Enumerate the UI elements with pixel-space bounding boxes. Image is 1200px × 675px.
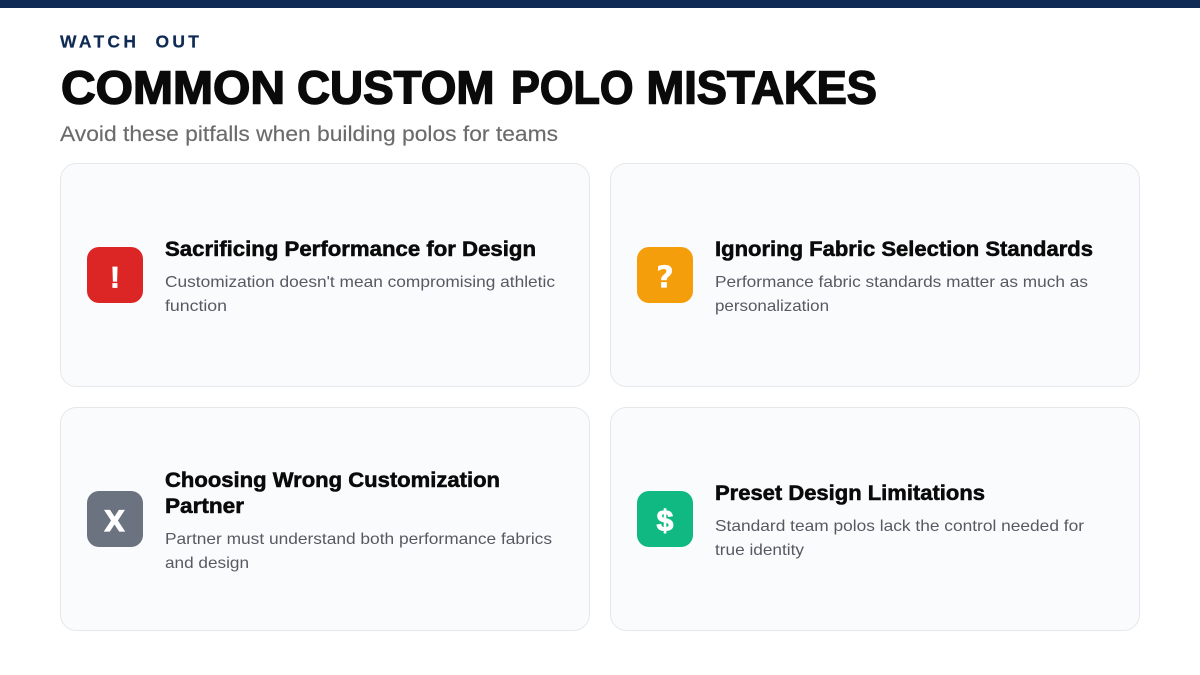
- card description: Customization doesn't mean compromising athletic: [165, 274, 555, 291]
- card title: [165, 468, 500, 518]
- card description: Partner must understand both performance fabrics: [165, 531, 552, 548]
- icon: x mark: X: [104, 504, 126, 538]
- card description: [165, 531, 552, 572]
- panel: preset design limitations: [610, 408, 1140, 630]
- card title: Partner: [165, 494, 245, 518]
- card description: and design: [165, 555, 249, 572]
- card description: function: [165, 298, 227, 315]
- eyebrow: watch out: WATCH OUT: [60, 32, 199, 52]
- panel: choosing wrong customization partner: [60, 408, 590, 630]
- card description: [715, 518, 1085, 559]
- card description: [165, 274, 555, 315]
- panel: sacrificing performance for design: [60, 164, 590, 386]
- icon: x mark: [87, 491, 143, 547]
- icon: question mark: ?: [656, 260, 674, 296]
- title: MISTAKES: [646, 62, 877, 114]
- icon: exclamation mark: !: [110, 262, 120, 294]
- card title: Sacrificing Performance for Design: [165, 237, 536, 261]
- title: CUSTOM: [297, 62, 494, 114]
- icon: dollar sign: [637, 491, 693, 547]
- card description: Performance fabric standards matter as much as: [715, 274, 1088, 291]
- card title: Preset Design Limitations: [715, 481, 985, 505]
- card description: Standard team polos lack the control needed for: [715, 518, 1085, 535]
- title: POLO: [511, 62, 634, 114]
- icon: question mark: [637, 247, 693, 303]
- title: COMMON: [61, 62, 285, 114]
- card title: Ignoring Fabric Selection Standards: [715, 237, 1093, 261]
- subtitle: Avoid these pitfalls when building polos for teams: [60, 123, 558, 146]
- icon: dollar sign: $: [657, 505, 674, 538]
- card description: [715, 274, 1088, 315]
- card description: true identity: [715, 542, 804, 559]
- card title: Choosing Wrong Customization: [165, 468, 500, 492]
- panel: ignoring fabric selection standards: [610, 164, 1140, 386]
- title: [61, 62, 877, 114]
- icon: exclamation mark: [87, 247, 143, 303]
- card description: personalization: [715, 298, 829, 315]
